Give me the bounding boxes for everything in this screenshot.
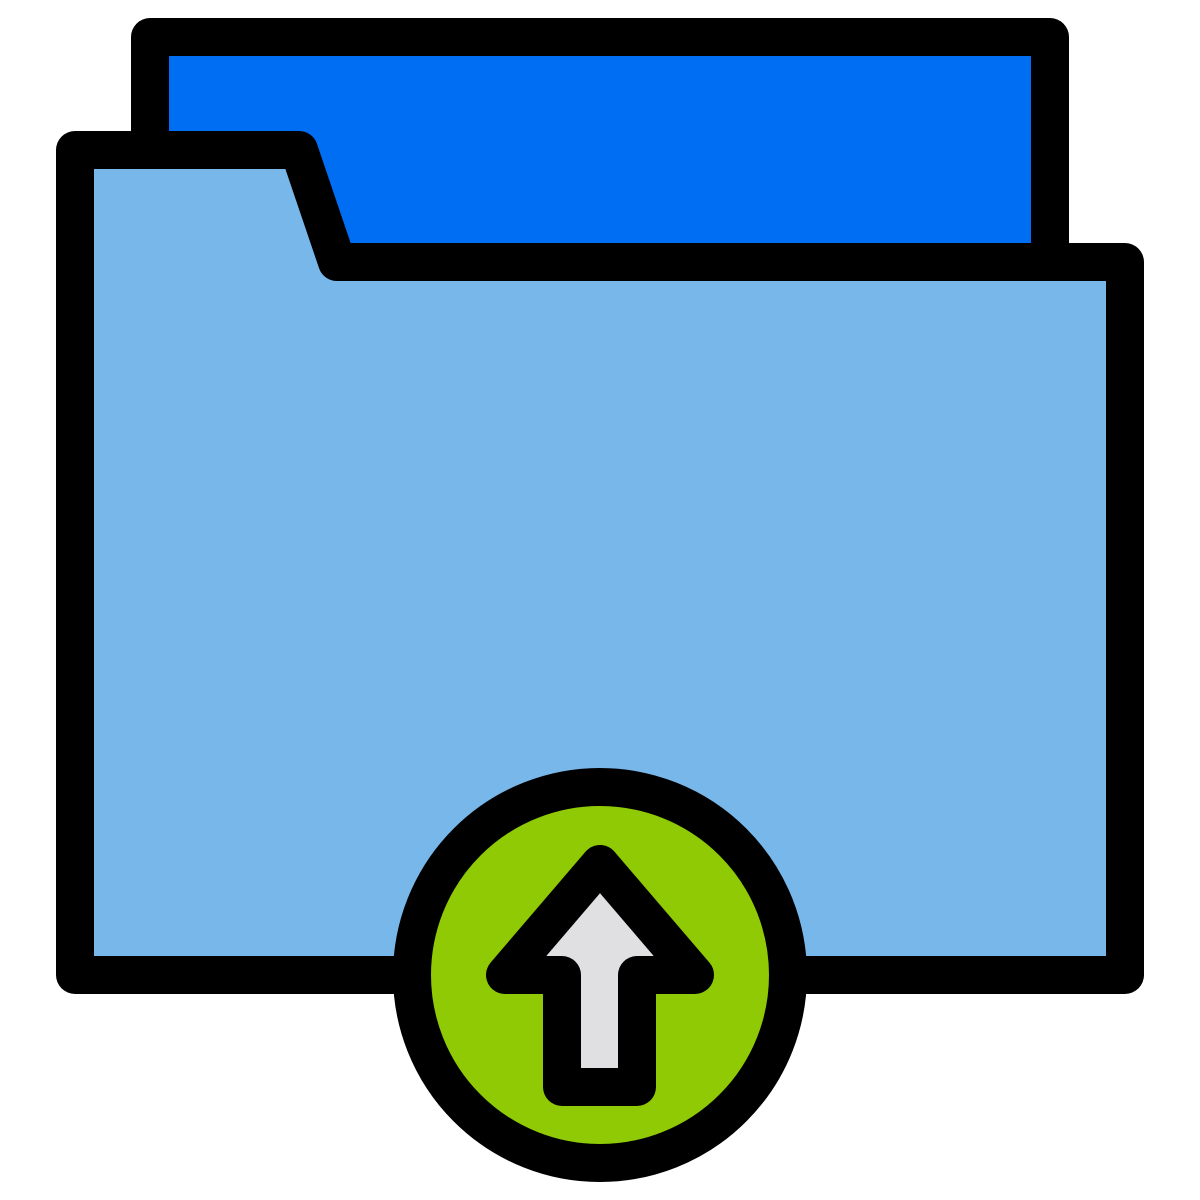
front folder — [75, 150, 1125, 975]
back folder sheet — [150, 37, 1050, 267]
upload badge circle — [412, 787, 788, 1163]
icon: up arrow — [505, 864, 695, 1087]
